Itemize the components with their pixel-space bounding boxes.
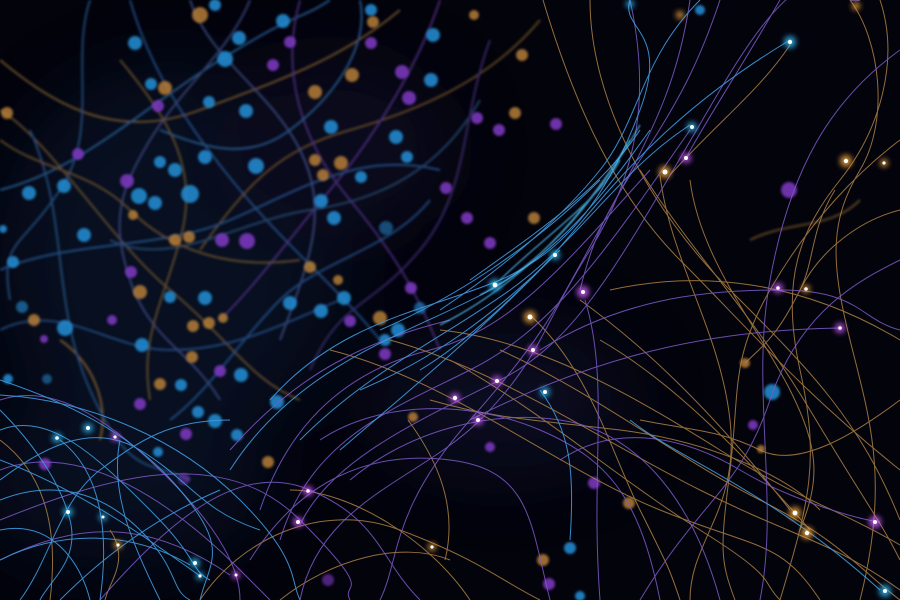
blurred background strands [0, 0, 860, 480]
blurred amber lights [1, 7, 765, 566]
bright cyan bundle [440, 125, 640, 325]
blurred purple lights [39, 36, 797, 590]
ambient glow [0, 60, 630, 560]
